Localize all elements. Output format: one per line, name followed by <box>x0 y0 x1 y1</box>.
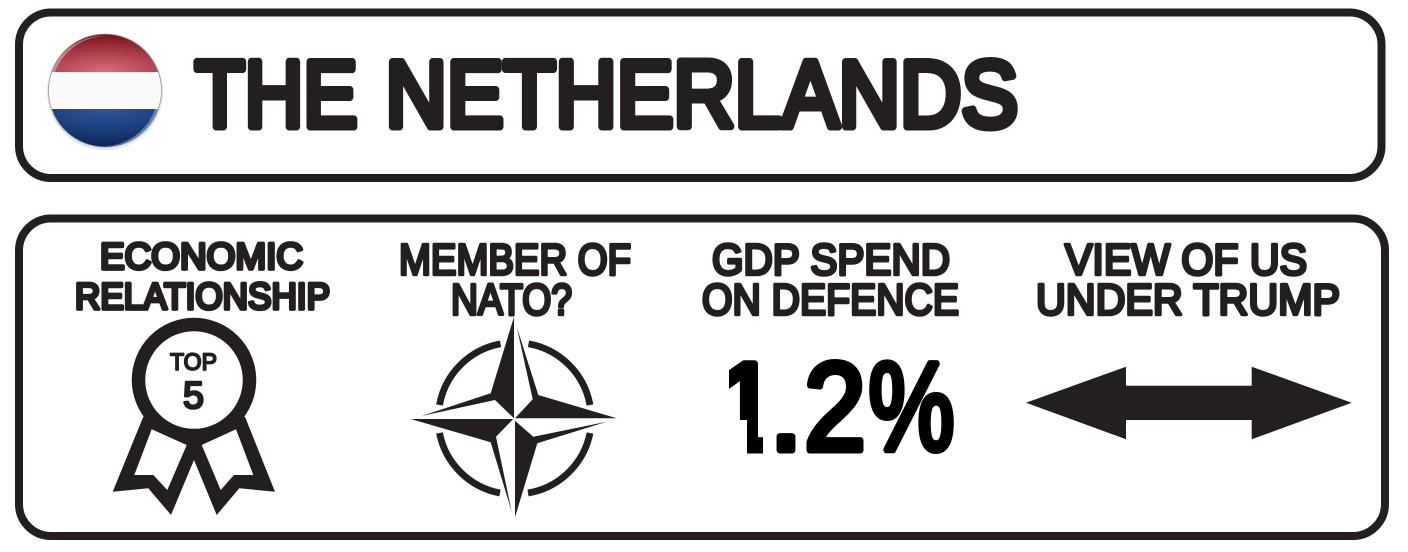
panel: title <box>19 12 1382 178</box>
heading: economic relationship <box>75 236 330 317</box>
panel: indicators <box>19 218 1385 536</box>
heading: economic relationship: ECONOMIC <box>100 236 303 277</box>
label: top 5: 5 <box>183 375 204 417</box>
heading: member of NATO: NATO? <box>451 276 572 324</box>
icon: top 5 rosette <box>113 324 275 515</box>
label: top 5: TOP <box>170 349 217 376</box>
heading: view of US: UNDER TRUMP <box>1036 276 1340 324</box>
value: 1.2% <box>729 359 954 454</box>
heading: GDP spend: GDP SPEND <box>712 236 950 284</box>
icon: NATO compass star <box>411 317 617 517</box>
value: 1.2%: . <box>769 338 803 477</box>
value: 1.2%: 2 <box>804 338 866 477</box>
value: 1.2%: 1 <box>712 338 782 477</box>
heading: economic relationship: RELATIONSHIP <box>75 276 330 317</box>
heading: country name: THE <box>195 42 358 146</box>
icon: double-headed arrow <box>1026 367 1352 439</box>
label: top 5 <box>170 349 217 417</box>
heading: country name: NETHERLANDS <box>386 42 1018 146</box>
heading: member of NATO <box>399 236 631 324</box>
icon: Netherlands flag badge <box>45 33 165 150</box>
heading: view of US: VIEW OF US <box>1065 236 1307 284</box>
value: 1.2%: % <box>868 338 954 477</box>
heading: view of US <box>1036 236 1340 324</box>
heading: member of NATO: MEMBER OF <box>399 236 631 284</box>
heading: GDP spend <box>702 236 959 324</box>
heading: GDP spend: ON DEFENCE <box>702 276 959 324</box>
